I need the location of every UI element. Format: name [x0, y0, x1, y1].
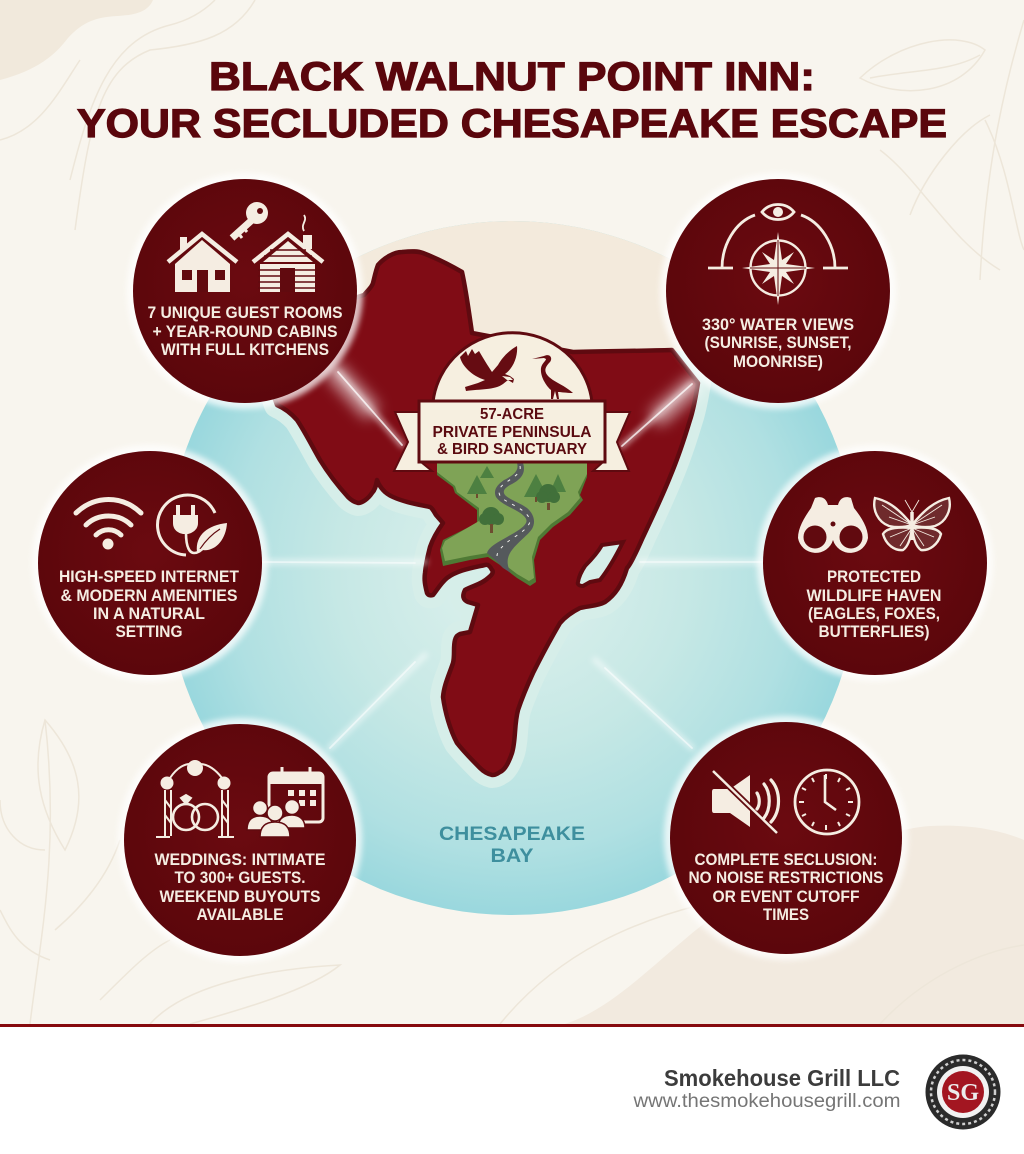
- panel: weddings: WEEKEND BUYOUTS: [160, 888, 320, 906]
- panel: wildlife: (EAGLES, FOXES,: [808, 605, 940, 623]
- icon: clock: [795, 770, 859, 834]
- ribbon banner: & BIRD SANCTUARY: [437, 441, 587, 458]
- panel: seclusion: [664, 716, 908, 960]
- panel: seclusion: NO NOISE RESTRICTIONS: [688, 869, 884, 887]
- panel: guest rooms: [127, 173, 363, 409]
- icon: key: [232, 202, 268, 238]
- road: [487, 463, 534, 573]
- icon: compass: [742, 232, 815, 305]
- icon: company logo: [926, 1054, 1000, 1130]
- CHESAPEAKE BAY label: CHESAPEAKE: [439, 823, 585, 845]
- panel: water views: MOONRISE): [733, 353, 823, 371]
- panel: wildlife: BUTTERFLIES): [818, 623, 930, 641]
- panel: guest rooms: + YEAR-ROUND CABINS: [152, 323, 338, 341]
- ribbon banner: [394, 401, 630, 471]
- icon: log cabin: [253, 215, 323, 292]
- light rays: [262, 372, 762, 748]
- panel: internet: SETTING: [116, 623, 182, 641]
- panel: weddings: [118, 718, 362, 962]
- map: water and land circle: [165, 200, 859, 915]
- icon: house: [168, 234, 237, 292]
- panel: internet: [32, 445, 268, 681]
- panel: internet: & MODERN AMENITIES: [60, 587, 238, 605]
- panel: weddings: WEDDINGS: INTIMATE: [154, 851, 326, 869]
- panel: seclusion: OR EVENT CUTOFF: [712, 888, 860, 906]
- icon: company logo: SG: [947, 1080, 979, 1106]
- icon: calendar and guests: [247, 767, 323, 837]
- icon: muted speaker: [712, 771, 778, 833]
- title: YOUR SECLUDED CHESAPEAKE ESCAPE: [77, 102, 947, 146]
- panel: internet: HIGH-SPEED INTERNET: [59, 568, 239, 586]
- panel: internet: IN A NATURAL: [93, 605, 205, 623]
- title: [77, 55, 947, 146]
- panel: wildlife: [757, 445, 993, 681]
- panel: seclusion: TIMES: [763, 906, 809, 924]
- eagle: [460, 346, 517, 391]
- map: peninsula: [250, 251, 698, 775]
- panel: weddings: AVAILABLE: [196, 906, 284, 924]
- panel: guest rooms: 7 UNIQUE GUEST ROOMS: [148, 304, 342, 322]
- icon: eye and arc: [708, 204, 848, 268]
- heron: [532, 355, 573, 399]
- ribbon banner: PRIVATE PENINSULA: [432, 424, 592, 441]
- panel: water views: [660, 173, 896, 409]
- panel: wildlife: WILDLIFE HAVEN: [806, 587, 942, 605]
- panel: seclusion: COMPLETE SECLUSION:: [694, 851, 878, 869]
- panel: guest rooms: WITH FULL KITCHENS: [161, 341, 329, 359]
- CHESAPEAKE BAY label: [439, 823, 585, 867]
- tree round: [479, 484, 560, 525]
- icon: plug and leaf: [158, 495, 227, 555]
- panel: wildlife: PROTECTED: [827, 568, 921, 586]
- medallion dome: [433, 333, 592, 402]
- footer: Smokehouse Grill LLC: [664, 1065, 900, 1091]
- icon: wedding arch and rings: [156, 761, 234, 837]
- CHESAPEAKE BAY label: BAY: [490, 845, 534, 867]
- tree conifers: [467, 466, 566, 497]
- icon: butterfly: [874, 498, 950, 550]
- icon: binoculars: [798, 497, 868, 553]
- center green land with road and trees: [437, 460, 587, 586]
- icon: wifi: [76, 500, 141, 550]
- ribbon banner: 57-ACRE: [480, 406, 544, 423]
- panel: water views: (SUNRISE, SUNSET,: [704, 334, 852, 352]
- panel: water views: 330° WATER VIEWS: [702, 316, 854, 334]
- panel: weddings: TO 300+ GUESTS.: [174, 869, 306, 887]
- footer: www.thesmokehousegrill.com: [632, 1091, 900, 1112]
- island inlet: [578, 542, 623, 586]
- title: BLACK WALNUT POINT INN:: [209, 55, 815, 99]
- footer: [0, 1024, 1024, 1154]
